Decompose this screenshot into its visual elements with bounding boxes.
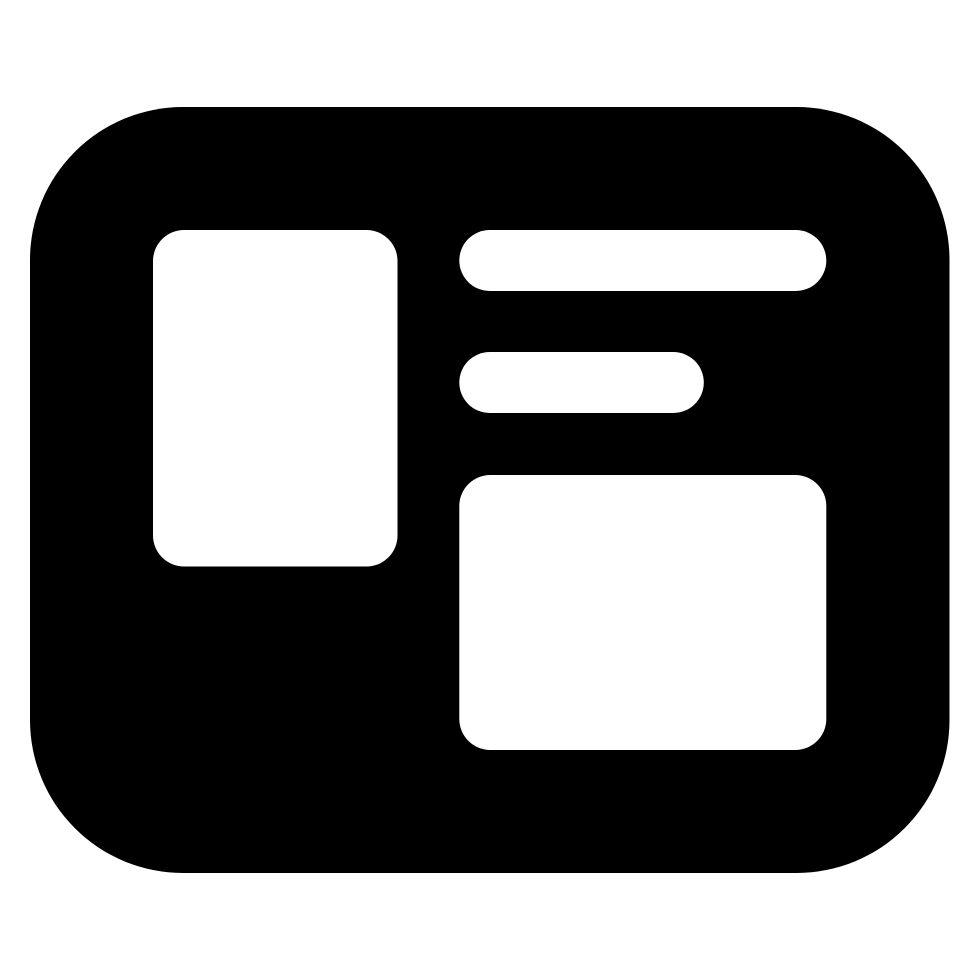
text line: short bar (459, 352, 704, 413)
image placeholder: left block (153, 230, 398, 566)
text line: long bar (459, 230, 826, 291)
panel: black rounded card (30, 107, 950, 873)
content block: lower right (459, 475, 826, 750)
